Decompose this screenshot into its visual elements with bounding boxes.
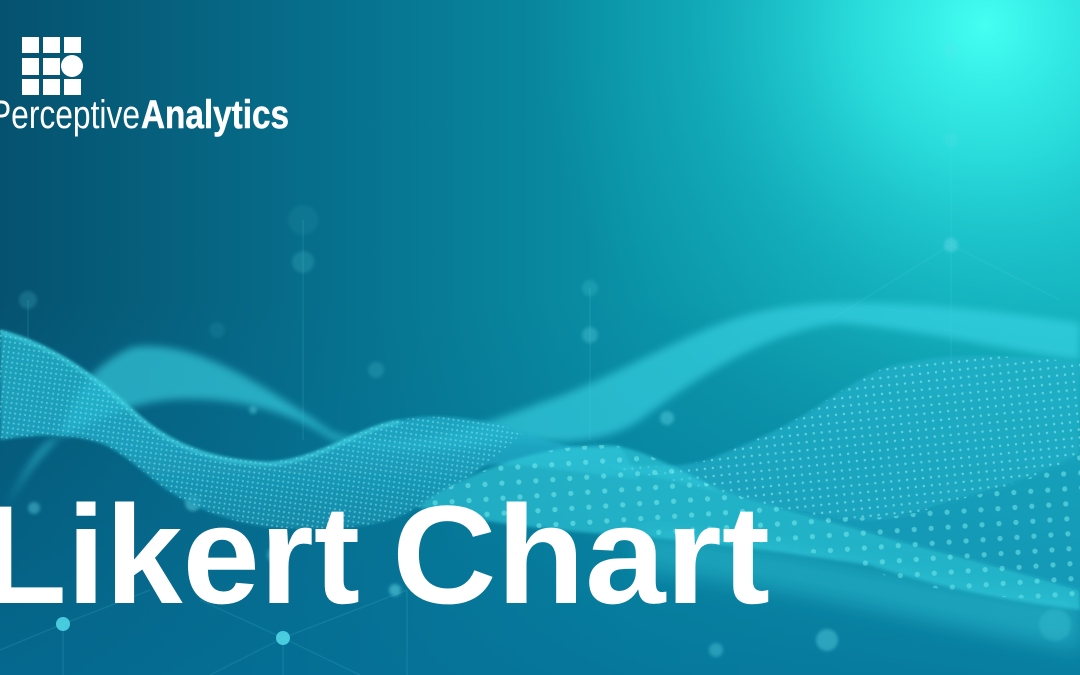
mesh wave lower [417, 445, 1080, 650]
logo [0, 37, 140, 137]
title: Chart [392, 476, 770, 633]
logo wordmark bold: Analytics [141, 93, 289, 137]
mesh wave left [0, 330, 640, 529]
logo mark [22, 37, 83, 95]
title [0, 476, 770, 633]
back ribbon wave [0, 303, 1080, 520]
mesh wave right [600, 356, 1080, 520]
